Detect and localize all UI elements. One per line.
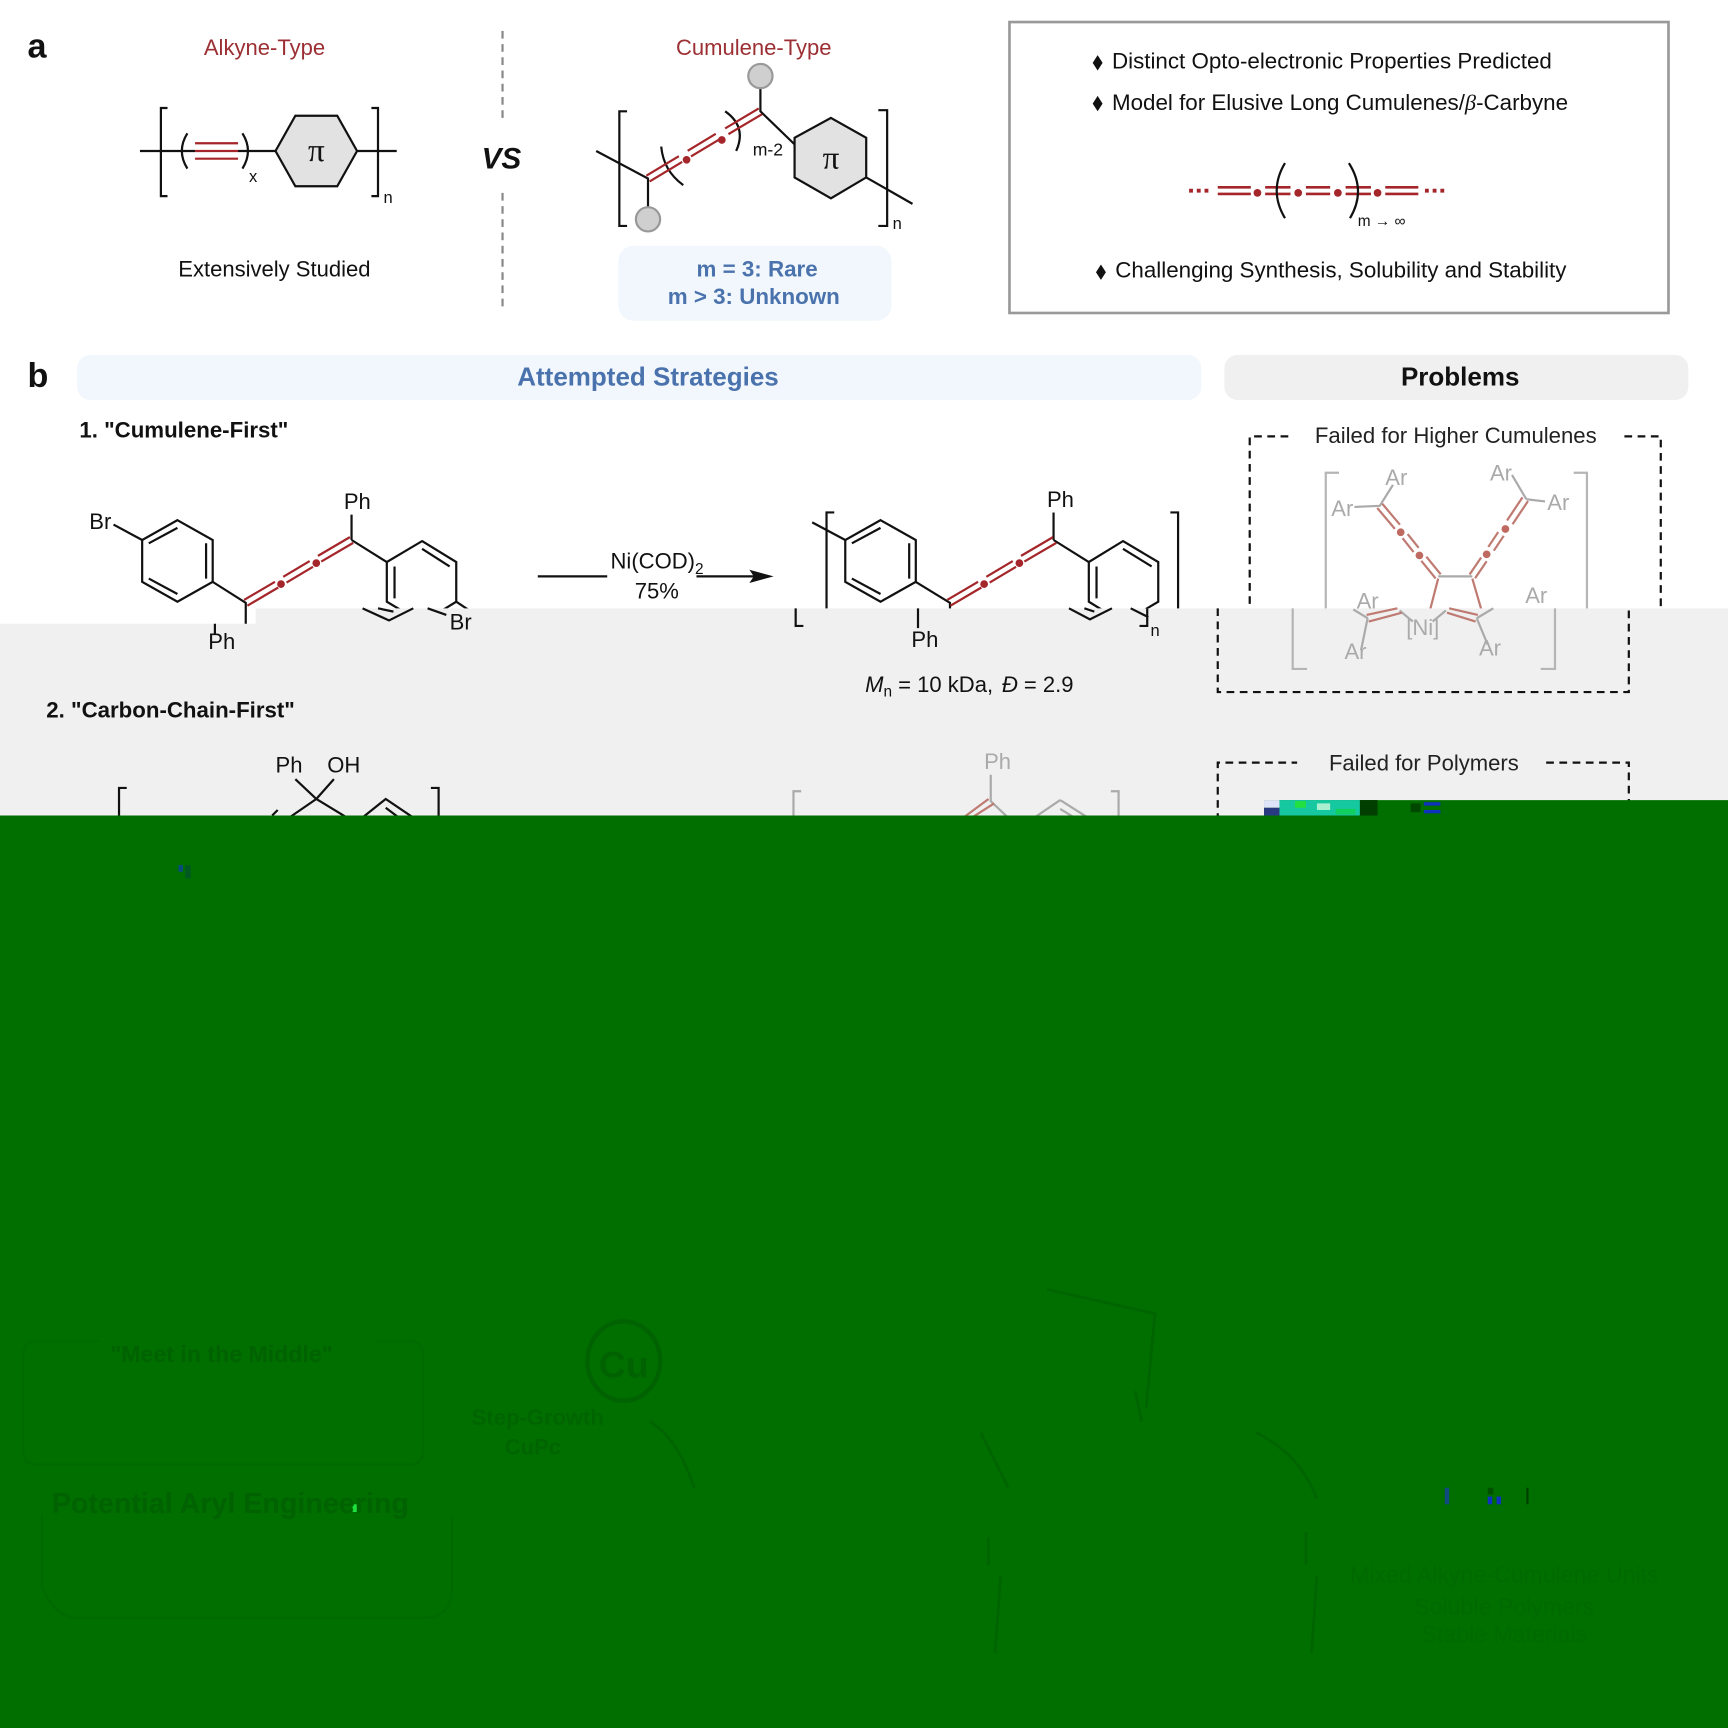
problem box lower part: nickel complex: Ar bbox=[1525, 583, 1547, 608]
structure: carbinol polymer fragment: OH bbox=[327, 753, 360, 778]
faint structure lines bbox=[650, 1289, 1317, 1653]
arrow: Ni(COD)2 reaction: Ni(COD) bbox=[611, 549, 695, 574]
structure: alkyne-type polymer: n bbox=[384, 188, 393, 207]
faint section: potential aryl engineering bbox=[42, 1488, 452, 1618]
callout: rare and unknown: m = 3: Rare bbox=[697, 257, 818, 282]
structure: dibromo cumulene monomer bbox=[89, 489, 476, 628]
faint label: step-growth bbox=[472, 1405, 604, 1460]
faint section: potential aryl engineering: Potential Aryl Engineering bbox=[52, 1488, 409, 1520]
structure: cumulene-type polymer: n bbox=[893, 214, 902, 233]
structure: greyed target polymer fragment: Ph bbox=[984, 749, 1011, 774]
problem box: failed for polymers: Failed for Polymers bbox=[1329, 750, 1519, 775]
problem box: failed for higher cumulenes: Ar bbox=[1490, 460, 1512, 485]
problem box: failed for higher cumulenes: Failed for Higher Cumulenes bbox=[1315, 423, 1597, 448]
faint text block bbox=[1350, 1562, 1659, 1647]
structure: carbinol polymer fragment: Ph bbox=[276, 753, 302, 778]
panel: properties box bbox=[1009, 22, 1668, 313]
problem box lower part: nickel complex: Ar bbox=[1357, 588, 1379, 613]
faint icon: Cu catalyst bbox=[587, 1321, 660, 1401]
header: attempted strategies: Attempted Strategies bbox=[517, 362, 779, 392]
structure fragment: polymer lower part: n bbox=[1151, 621, 1160, 640]
structure: alkyne-type polymer: π bbox=[308, 133, 325, 169]
arrow: Ni(COD)2 reaction: 2 bbox=[695, 561, 704, 578]
callout: rare and unknown: m > 3: Unknown bbox=[668, 284, 840, 309]
structure: carbinol polymer fragment bbox=[119, 753, 439, 824]
structure: cumulene-type polymer bbox=[596, 64, 912, 233]
structure: cumulene-type polymer: π bbox=[823, 141, 840, 177]
panel: properties box: Distinct Opto-electronic Properties Predicted bbox=[1112, 48, 1552, 73]
problem box: failed for higher cumulenes bbox=[1250, 423, 1661, 617]
faint text block: Stable Materials bbox=[1421, 1621, 1587, 1647]
problem box lower part: nickel complex: Ar bbox=[1479, 636, 1501, 661]
structure: dibromo cumulene monomer: Br bbox=[89, 509, 111, 534]
polymer data: Mn and dispersity: Đ = 2.9 bbox=[1002, 672, 1074, 697]
glitch: small noise marks bbox=[179, 865, 1529, 1512]
divider with VS: VS bbox=[482, 143, 521, 176]
band: corrupted green section bbox=[0, 800, 1728, 1728]
structure fragment: polymer lower part bbox=[796, 608, 1160, 652]
problem box: failed for higher cumulenes: Ar bbox=[1385, 465, 1407, 490]
structure: greyed target polymer fragment bbox=[793, 749, 1119, 821]
structure fragment: monomer lower part: Br bbox=[450, 609, 472, 634]
structure fragment: polymer lower part: Ph bbox=[911, 627, 938, 652]
faint icon: Cu catalyst: Cu bbox=[599, 1344, 649, 1386]
structure: polymer product: Ph bbox=[1047, 487, 1074, 512]
panel label a: a bbox=[28, 27, 48, 65]
faint text block: Mixed Alkyne-Cumulene Units bbox=[1350, 1562, 1659, 1588]
faint label: step-growth: CuPc bbox=[505, 1435, 561, 1460]
panel: properties box: Model for Elusive Long Cumulenes/β-Carbyne bbox=[1112, 90, 1568, 115]
polymer data: Mn and dispersity: = 10 kDa, bbox=[892, 672, 993, 697]
header: problems: Problems bbox=[1401, 362, 1519, 392]
header: problems bbox=[1224, 355, 1688, 400]
arrow: Ni(COD)2 reaction bbox=[538, 549, 774, 603]
problem box: failed for higher cumulenes: Ar bbox=[1547, 490, 1569, 515]
callout: rare and unknown bbox=[618, 246, 892, 321]
panel: properties box: m → ∞ bbox=[1358, 213, 1406, 230]
faint text block: Soluble Polymers bbox=[1414, 1593, 1594, 1619]
faint section: meet in the middle bbox=[23, 1341, 423, 1465]
problem box: failed for polymers bbox=[1218, 750, 1629, 821]
problem box: failed for higher cumulenes: Ar bbox=[1331, 496, 1353, 521]
caption: extensively studied: Extensively Studied bbox=[178, 257, 371, 282]
problem box lower part: nickel complex: [Ni] bbox=[1406, 615, 1439, 640]
polymer data: Mn and dispersity: M bbox=[865, 672, 884, 697]
structure: polymer product bbox=[812, 487, 1178, 623]
problem box lower part: nickel complex bbox=[1218, 583, 1629, 692]
panel label b: b bbox=[28, 357, 48, 395]
glitch: pixel noise strip bbox=[1264, 800, 1440, 816]
structure fragment: monomer lower part: Ph bbox=[208, 629, 235, 654]
heading: cumulene-type: Cumulene-Type bbox=[676, 35, 832, 60]
problem box lower part: nickel complex: Ar bbox=[1344, 639, 1367, 664]
arrow: Ni(COD)2 reaction: 75% bbox=[635, 578, 679, 603]
heading: carbon-chain-first: 2. "Carbon-Chain-First" bbox=[46, 697, 295, 722]
faint section: meet in the middle: "Meet in the Middle" bbox=[110, 1341, 333, 1367]
structure fragment: monomer lower part bbox=[208, 608, 472, 654]
structure: alkyne-type polymer: x bbox=[249, 167, 258, 186]
panel: properties box: Challenging Synthesis, Solubility and Stability bbox=[1115, 258, 1567, 283]
structure: dibromo cumulene monomer: Ph bbox=[344, 489, 371, 514]
structure: alkyne-type polymer bbox=[140, 108, 397, 207]
faint label: step-growth: Step-Growth bbox=[472, 1405, 604, 1430]
band: white notch and gray section bbox=[0, 608, 1728, 1728]
heading: alkyne-type: Alkyne-Type bbox=[204, 35, 325, 60]
heading: cumulene-first: 1. "Cumulene-First" bbox=[79, 418, 288, 443]
header: attempted strategies bbox=[77, 355, 1201, 400]
polymer data: Mn and dispersity: n bbox=[883, 683, 892, 700]
structure: cumulene-type polymer: m-2 bbox=[753, 139, 783, 159]
